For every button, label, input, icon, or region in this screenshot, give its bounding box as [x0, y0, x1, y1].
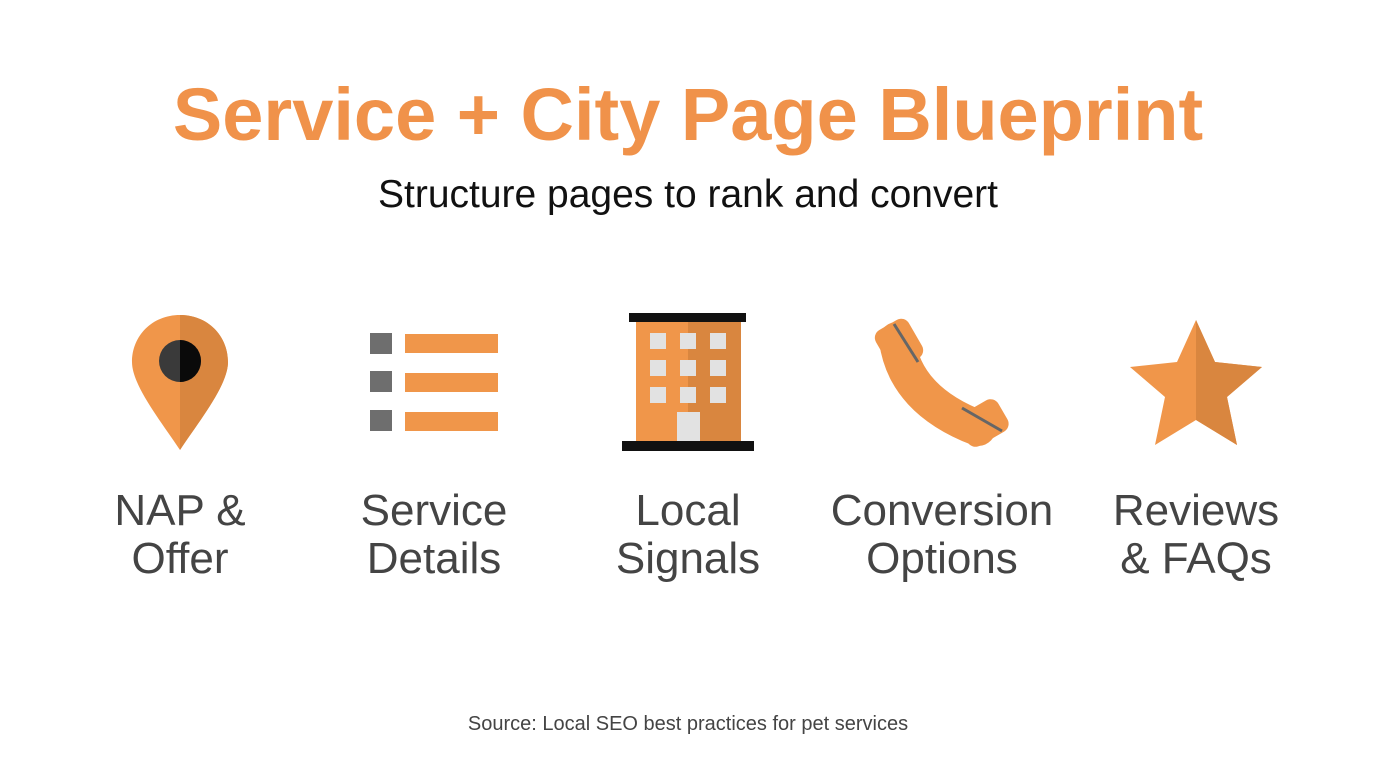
label: Reviews & FAQs: Reviews — [1113, 486, 1279, 535]
title: Service + City Page Blueprint — [173, 73, 1203, 156]
label: Reviews & FAQs: & FAQs — [1120, 534, 1272, 583]
label: Conversion Options: Conversion — [831, 486, 1053, 535]
label: Service Details: Service — [361, 486, 507, 535]
icon: building — [622, 313, 754, 451]
icon: phone — [872, 315, 1012, 450]
label: Local Signals: Signals — [616, 534, 760, 583]
label: NAP & Offer: Offer — [131, 534, 229, 583]
icon: list — [370, 333, 498, 431]
label: NAP & Offer: NAP & — [114, 486, 246, 535]
label: Conversion Options: Options — [866, 534, 1018, 583]
icon: star — [1130, 320, 1262, 445]
label: Service Details: Details — [367, 534, 501, 583]
source note: Source: Local SEO best practices for pet services — [468, 713, 908, 735]
label: Local Signals: Local — [635, 486, 741, 535]
icon: map pin — [132, 315, 228, 450]
subtitle: Structure pages to rank and convert — [378, 173, 998, 216]
